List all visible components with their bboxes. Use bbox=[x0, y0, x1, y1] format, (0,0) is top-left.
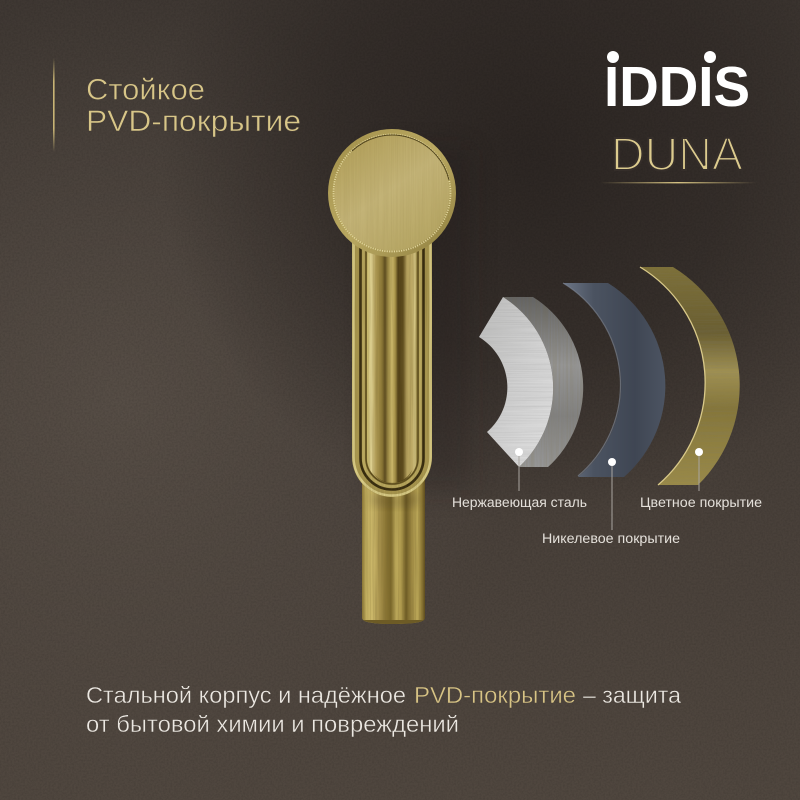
callout: nickel coating bbox=[542, 458, 680, 546]
caption text: – защита bbox=[583, 682, 682, 708]
logo: iDDiS: IDDIS bbox=[604, 55, 750, 119]
U-shaped loop body bbox=[352, 232, 432, 502]
callout: coloured coating: Цветное покрытие bbox=[640, 495, 762, 510]
caption text: от бытовой химии и повреждений bbox=[86, 711, 459, 737]
callout: stainless steel bbox=[452, 448, 587, 510]
round disc head bbox=[328, 129, 456, 257]
callout: coloured coating bbox=[640, 448, 762, 510]
lower tube bbox=[362, 470, 425, 624]
callout: stainless steel: Нержавеющая сталь bbox=[452, 495, 587, 510]
caption text bbox=[86, 682, 682, 737]
gold vertical rule beside heading bbox=[53, 58, 55, 152]
layer segment: nickel coating bbox=[563, 283, 665, 477]
caption text: PVD-покрытие bbox=[414, 682, 576, 708]
handle cast shadow bbox=[372, 150, 470, 490]
callout: nickel coating: Никелевое покрытие bbox=[542, 531, 680, 546]
layer segment: stainless steel bbox=[478, 295, 590, 470]
caption text: Стальной корпус и надёжное bbox=[86, 682, 406, 708]
gold underline beneath DUNA bbox=[600, 182, 756, 183]
heading: Стойкое PVD-покрытие: PVD-покрытие bbox=[86, 105, 301, 138]
product: brushed-gold hand shower bbox=[328, 129, 470, 624]
heading: Стойкое PVD-покрытие bbox=[86, 74, 301, 138]
series name: DUNA: DUNA bbox=[611, 128, 743, 180]
heading: Стойкое PVD-покрытие: Стойкое bbox=[86, 74, 205, 106]
layer segment: coloured PVD coating bbox=[638, 265, 742, 487]
